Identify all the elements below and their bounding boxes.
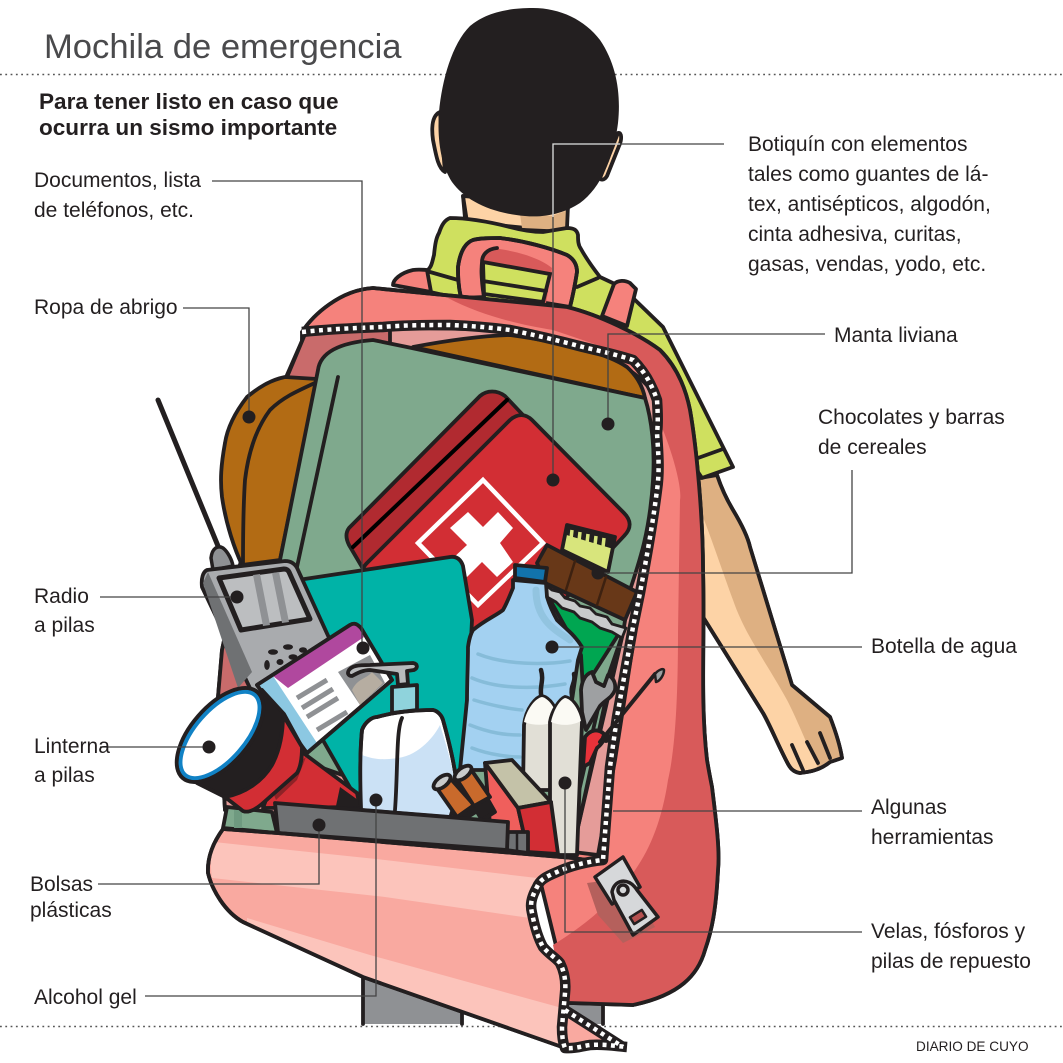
label: botiquin: tales como guantes de lá- [748, 163, 988, 186]
label: alcohol: Alcohol gel [34, 986, 137, 1009]
zipper [302, 325, 659, 1048]
callout leader lines [98, 144, 862, 996]
green panel [223, 340, 654, 856]
backpack interior [218, 327, 657, 855]
label: documentos: de teléfonos, etc. [34, 199, 194, 222]
title: Mochila de emergencia [44, 28, 402, 66]
callout dots [202, 410, 614, 832]
ears [432, 112, 621, 180]
radio [158, 400, 330, 705]
source credit: DIARIO DE CUYO [916, 1039, 1029, 1054]
shirt [425, 218, 733, 478]
illustration: person with backpack [158, 8, 842, 1048]
teal folder [298, 557, 472, 805]
label: herramientas: Algunas [871, 796, 947, 819]
backpack handle [458, 238, 577, 307]
subtitle: Para tener listo en caso que [39, 89, 338, 114]
label: chocolates: Chocolates y barras [818, 406, 1005, 429]
label: botella: Botella de agua [871, 635, 1017, 658]
label: botiquin: tex, antisépticos, algodón, [748, 193, 991, 216]
label: radio: a pilas [34, 614, 95, 637]
right shoulder strap [602, 281, 636, 326]
ID card [257, 624, 392, 753]
subtitle: ocurra un sismo importante [39, 115, 337, 140]
label: linterna: a pilas [34, 764, 95, 787]
label: ropa: Ropa de abrigo [34, 296, 178, 319]
alcohol gel bottle [348, 663, 457, 816]
water bottle [460, 565, 582, 770]
label: manta: Manta liviana [834, 324, 958, 347]
label: radio: Radio [34, 585, 89, 608]
label: chocolates: de cereales [818, 436, 927, 459]
plastic bags tray [275, 803, 528, 853]
legs [363, 970, 603, 1024]
batteries [431, 763, 495, 820]
matches box [485, 760, 558, 854]
left shoulder strap [393, 270, 431, 292]
label: bolsas: plásticas [30, 899, 112, 922]
first aid kit [346, 392, 630, 690]
cereal bar [562, 525, 615, 572]
label: documentos: Documentos, lista [34, 169, 201, 192]
backpack body [300, 288, 719, 1005]
blanket roll [221, 377, 317, 565]
neck [463, 196, 568, 232]
hair [439, 8, 619, 216]
label: botiquin: Botiquín con elementos [748, 133, 967, 156]
front pocket flap [208, 829, 623, 1048]
zipper pull [587, 857, 658, 943]
label: linterna: Linterna [34, 735, 110, 758]
wrench and screwdriver handle [581, 672, 615, 767]
screwdriver shaft [600, 669, 664, 743]
label: bolsas: Bolsas [30, 873, 93, 896]
green wrapper sliver [570, 633, 623, 830]
right arm [700, 475, 842, 773]
brown blanket top [413, 335, 645, 398]
label: herramientas: herramientas [871, 826, 994, 849]
flashlight [161, 673, 360, 812]
label: velas: pilas de repuesto [871, 950, 1031, 973]
candles [523, 670, 582, 855]
label: botiquin: cinta adhesiva, curitas, [748, 223, 962, 246]
label: botiquin: gasas, vendas, yodo, etc. [748, 253, 986, 276]
label: velas: Velas, fósforos y [871, 920, 1026, 943]
chocolate bar [537, 545, 637, 690]
